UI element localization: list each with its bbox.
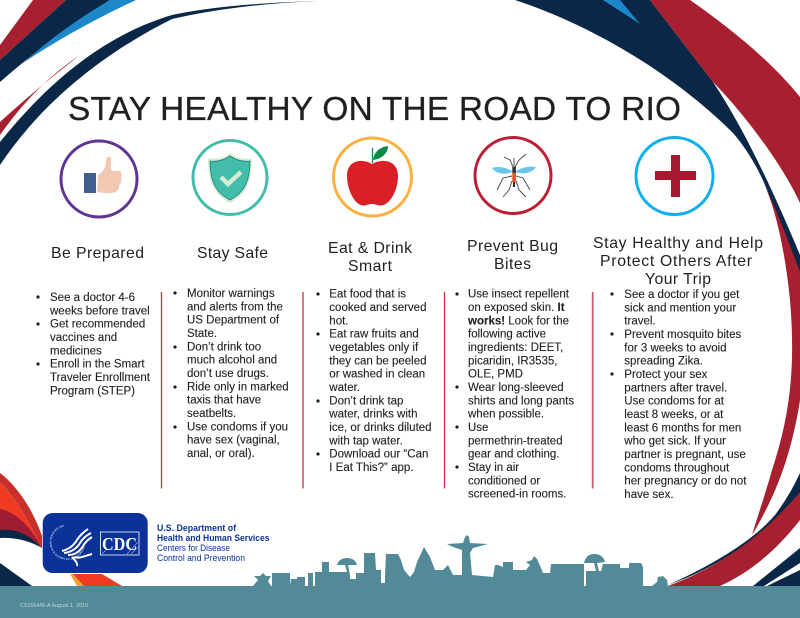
list: Stay Safe: have sex (vaginal,: [187, 435, 280, 447]
list: Stay Healthy and Help Protect Others: partner is pregnant, use: [624, 449, 746, 461]
list: Prevent Bug Bites: picaridin, IR3535,: [468, 355, 558, 367]
list: Prevent Bug Bites: Wear long-sleeved: [468, 382, 564, 394]
list: Stay Safe: State.: [187, 328, 217, 340]
list: Stay Healthy and Help Protect Others: [610, 289, 747, 501]
icon: mosquito: [475, 138, 551, 214]
list: Stay Safe: much alcohol and: [187, 355, 277, 367]
heading: Eat & Drink Smart: Smart: [348, 258, 393, 275]
list: Stay Healthy and Help Protect Others: Prevent mosquito bites: [624, 329, 742, 341]
top-left swooshes: [0, 0, 318, 165]
list: Eat & Drink Smart: hot.: [329, 315, 348, 327]
list: Stay Healthy and Help Protect Others: have sex.: [624, 489, 674, 501]
list: Eat & Drink Smart: water, drinks with: [328, 409, 418, 421]
list: Stay Healthy and Help Protect Others: least 8 weeks, or at: [624, 409, 724, 421]
list: Be Prepared: Traveler Enrollment: [50, 372, 151, 384]
list: Prevent Bug Bites: works! Look for the: [467, 315, 569, 327]
heading: Prevent Bug Bites: Prevent Bug: [467, 238, 558, 255]
list: Be Prepared: See a doctor 4-6: [50, 292, 135, 304]
list: Prevent Bug Bites: Stay in air: [468, 462, 519, 474]
list: Stay Safe: Don’t drink too: [187, 341, 261, 353]
list: Prevent Bug Bites: on exposed skin. It: [468, 302, 565, 314]
list: Stay Healthy and Help Protect Others: spreading Zika.: [624, 356, 703, 368]
list: Stay Safe: anal, or oral).: [187, 448, 255, 460]
list: Eat & Drink Smart: they can be peeled: [329, 355, 427, 367]
list: Prevent Bug Bites: shirts and long pants: [468, 395, 574, 407]
icon: apple: [334, 138, 412, 216]
list: Eat & Drink Smart: water.: [328, 382, 360, 394]
list: Eat & Drink Smart: ice, or drinks diluted: [329, 422, 432, 434]
heading: Stay Healthy and Help Protect Others After Your Trip: [593, 235, 763, 288]
list: Prevent Bug Bites: Use insect repellent: [468, 289, 570, 301]
title: STAY HEALTHY ON THE ROAD TO RIO: [68, 91, 681, 128]
heading: Prevent Bug Bites: Bites: [494, 256, 531, 273]
logo: HHS and CDC: CDC: [102, 534, 137, 554]
list: Be Prepared: medicines: [50, 345, 102, 357]
list: Stay Healthy and Help Protect Others: Protect your sex: [624, 369, 708, 381]
list: Stay Safe: and alerts from the: [187, 301, 283, 313]
agency name text: Health and Human Services: [157, 533, 270, 544]
list: Eat & Drink Smart: vegetables only if: [329, 342, 419, 354]
list: Prevent Bug Bites: [455, 289, 574, 501]
list: Eat & Drink Smart: Eat food that is: [329, 289, 406, 301]
Rio skyline: [0, 535, 800, 618]
heading: Eat & Drink Smart: [328, 240, 412, 275]
logo: HHS and CDC: DEPARTMENT OF HEALTH & HUMAN SERVICES USA: [50, 524, 85, 560]
footer code and date: CS266445-A August 1, 2016: [20, 603, 88, 609]
heading: Stay Healthy and Help Protect Others After Your Trip: Stay Healthy and Help: [593, 235, 763, 252]
list: Stay Healthy and Help Protect Others: sick and mention your: [624, 302, 736, 314]
list: Stay Safe: Ride only in marked: [187, 381, 289, 393]
list: Eat & Drink Smart: Don’t drink tap: [329, 395, 403, 407]
heading: Eat & Drink Smart: Eat & Drink: [328, 240, 412, 257]
list: Stay Healthy and Help Protect Others: condoms throughout: [624, 462, 730, 474]
list: Prevent Bug Bites: Use: [468, 422, 488, 434]
logo: HHS and CDC: [42, 513, 148, 573]
list: Eat & Drink Smart: [316, 289, 432, 474]
heading: Prevent Bug Bites: [467, 238, 558, 273]
list: Eat & Drink Smart: Download our “Can: [329, 449, 428, 461]
icon: shield with check: [193, 140, 267, 214]
icon: thumbs up: [61, 141, 137, 217]
list: Prevent Bug Bites: conditioned or: [468, 475, 540, 487]
list: Prevent Bug Bites: following active: [468, 329, 546, 341]
list: Be Prepared: Enroll in the Smart: [50, 359, 145, 371]
list: Stay Safe: [173, 288, 289, 460]
list: Eat & Drink Smart: or washed in clean: [329, 369, 425, 381]
list: Stay Healthy and Help Protect Others: See a doctor if you get: [624, 289, 740, 301]
list: Prevent Bug Bites: OLE, PMD: [468, 369, 523, 381]
list: Eat & Drink Smart: I Eat This?” app.: [329, 462, 413, 474]
list: Stay Healthy and Help Protect Others: travel.: [624, 316, 656, 328]
list: Stay Healthy and Help Protect Others: who get sick. If your: [623, 436, 726, 448]
bottom-left swooshes: [0, 473, 122, 586]
agency name text: [157, 523, 270, 564]
bottom-right swooshes: [668, 473, 800, 586]
list: Eat & Drink Smart: cooked and served: [329, 302, 426, 314]
list: Eat & Drink Smart: with tap water.: [328, 435, 403, 447]
list: Stay Healthy and Help Protect Others: least 6 months for men: [624, 422, 741, 434]
list: Stay Healthy and Help Protect Others: her pregnancy or do not: [624, 476, 747, 488]
list: Stay Safe: Monitor warnings: [187, 288, 275, 300]
list: Be Prepared: [36, 292, 151, 397]
agency name text: Control and Prevention: [157, 553, 245, 564]
list: Prevent Bug Bites: screened-in rooms.: [468, 489, 566, 501]
list: Stay Healthy and Help Protect Others: for 3 weeks to avoid: [624, 342, 727, 354]
list: Stay Safe: seatbelts.: [187, 408, 236, 420]
list: Stay Healthy and Help Protect Others: partners after travel.: [624, 382, 727, 394]
icon: red cross: [636, 138, 713, 214]
agency name text: Centers for Disease: [157, 543, 230, 554]
list: Prevent Bug Bites: gear and clothing.: [468, 449, 559, 461]
heading: Stay Healthy and Help Protect Others After Your Trip: Protect Others After: [600, 253, 752, 270]
list: Prevent Bug Bites: when possible.: [467, 409, 544, 421]
list: Be Prepared: Program (STEP): [50, 385, 135, 397]
heading: Stay Healthy and Help Protect Others After Your Trip: Your Trip: [645, 271, 711, 288]
list: Be Prepared: Get recommended: [50, 319, 145, 331]
list: Be Prepared: vaccines and: [50, 332, 117, 344]
list: Stay Safe: don’t use drugs.: [187, 368, 269, 380]
list: Be Prepared: weeks before travel: [49, 305, 150, 317]
list: Stay Safe: US Department of: [187, 315, 280, 327]
heading: Stay Safe: Stay Safe: [197, 245, 268, 262]
list: Prevent Bug Bites: ingredients: DEET,: [468, 342, 563, 354]
list: Eat & Drink Smart: Eat raw fruits and: [329, 329, 419, 341]
heading: Be Prepared: Be Prepared: [51, 245, 144, 262]
list: Stay Healthy and Help Protect Others: Use condoms for at: [624, 396, 725, 408]
list: Prevent Bug Bites: permethrin-treated: [468, 435, 563, 447]
agency name text: U.S. Department of: [157, 523, 237, 534]
list: Stay Safe: Use condoms if you: [187, 421, 288, 433]
list: Stay Safe: taxis that have: [187, 395, 261, 407]
top-right swooshes: [515, 0, 800, 535]
